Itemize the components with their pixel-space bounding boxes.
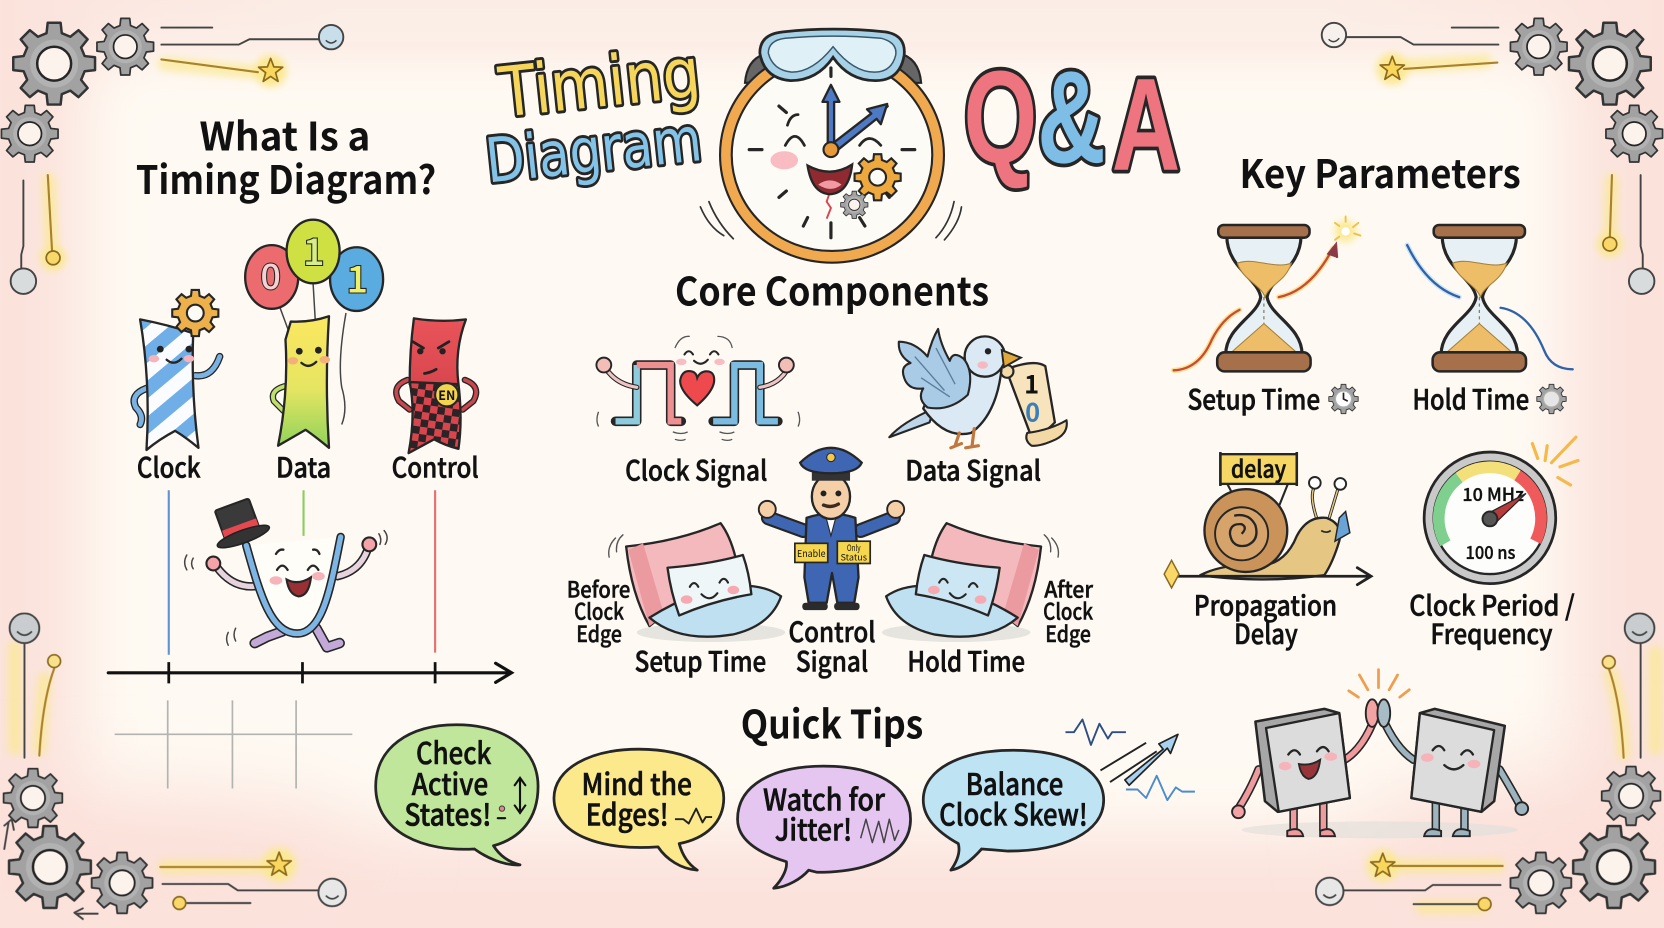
label: Control Signal: Signal [796, 640, 868, 680]
speech bubble: watch for jitter: Jitter! [775, 806, 852, 849]
character: control ribbon [396, 318, 476, 453]
gears on face [855, 154, 901, 200]
clock hands [822, 85, 839, 146]
motion lines [700, 202, 961, 240]
icon: clock signal with heart [596, 336, 800, 440]
label: Propagation Delay [1194, 583, 1337, 652]
character: data ribbon with balloons: 1 [346, 250, 369, 305]
arms and legs [1238, 716, 1521, 830]
arms [217, 548, 368, 586]
title word: Q&A: A [1112, 52, 1180, 198]
title word: Timing: Timing [495, 33, 704, 134]
heading: Timing Diagram? [136, 149, 436, 206]
speech bubble: watch for jitter: Watch for [763, 777, 886, 820]
time axis [108, 662, 512, 683]
character: officer: Enable [797, 546, 826, 560]
label: Clock Period / Frequency: Clock Period / [1409, 583, 1575, 623]
top hat [206, 495, 271, 552]
speech bubble: check active states: Active [412, 761, 488, 804]
icon: carrier pigeon with scroll [889, 329, 1067, 448]
label: Clock Signal: Clock Signal [625, 449, 767, 489]
character: officer: Only [847, 542, 861, 554]
speech bubble: balance clock skew: Clock Skew! [939, 792, 1088, 835]
icon: hold pillows [882, 523, 1058, 642]
mouth [808, 164, 852, 194]
burst [1349, 670, 1409, 697]
character: dancing clock edge with top hat [185, 495, 387, 647]
character: data ribbon with balloons: 1 [302, 222, 325, 277]
panel: core components [567, 261, 1094, 680]
goggles [760, 29, 904, 81]
chip: left [1255, 709, 1350, 812]
illustration: chips high-five [1232, 670, 1528, 838]
character: clock ribbon with gear [134, 290, 220, 450]
face [276, 550, 319, 570]
signal lines [169, 490, 435, 655]
label: Data: Data [276, 446, 331, 486]
icon: speed gauge: 100 ns [1466, 539, 1516, 565]
faint grid [115, 700, 352, 788]
panel: key parameters [1164, 143, 1578, 652]
speech bubble: check active states [376, 725, 538, 865]
icon: hold hourglass [1407, 225, 1573, 371]
panel: what is a timing diagram [108, 106, 512, 788]
speech bubble: watch for jitter [738, 766, 911, 888]
title: Timing Diagram Q&A [482, 33, 1180, 198]
label: Propagation Delay: Propagation [1194, 583, 1337, 623]
label: Control Signal: Control [788, 610, 876, 650]
corner decoration: bottom left [4, 613, 346, 919]
speech bubble: check active states: States! [404, 792, 491, 835]
speech bubble: mind the edges: Edges! [586, 792, 669, 835]
icon: snail with delay sign: delay [1231, 451, 1286, 485]
eyes and cheek [785, 115, 881, 145]
heading: What Is a [200, 106, 370, 163]
icon: small clock gear [1537, 384, 1566, 414]
label: Setup Time: Setup Time [1187, 378, 1320, 418]
corner decoration: bottom right [1316, 613, 1660, 913]
note: before clock edge: Before [567, 572, 630, 604]
label: Data Signal: Data Signal [905, 449, 1041, 489]
label: Clock: Clock [137, 446, 201, 486]
note: after clock edge: After [1044, 572, 1094, 604]
note: before clock edge: Edge [576, 617, 622, 649]
label: Propagation Delay: Delay [1234, 612, 1298, 652]
corner decoration: top left [1, 18, 343, 294]
scroll [1006, 363, 1055, 437]
label: Setup Time: Setup Time [635, 640, 766, 680]
speech bubble: balance clock skew [923, 750, 1104, 870]
label: Hold Time: Hold Time [1412, 378, 1529, 418]
heading: Key Parameters [1239, 143, 1521, 200]
crack [827, 189, 831, 219]
note: after clock edge [1043, 572, 1094, 649]
panel: quick tips [376, 694, 1195, 888]
clock ticks [749, 68, 915, 238]
speech bubble: mind the edges [554, 749, 724, 870]
note: after clock edge: Clock [1043, 595, 1093, 627]
icon: small clock gear [1329, 384, 1358, 414]
label: Control Signal [788, 610, 876, 680]
label: Clock Period / Frequency [1409, 583, 1575, 652]
label: Hold Time: Hold Time [907, 640, 1025, 680]
title word: Q&A: Q& [964, 44, 1106, 191]
legs [255, 628, 340, 647]
icon: speed gauge: 10 MHz [1462, 481, 1524, 507]
icon: setup hourglass [1174, 216, 1360, 371]
icon: clock mascot with goggles [700, 29, 961, 257]
note: before clock edge: Clock [574, 595, 624, 627]
heading: Quick Tips [741, 694, 923, 751]
character: data ribbon with balloons [245, 220, 383, 448]
character: data ribbon with balloons: 0 [260, 249, 281, 301]
chip: right [1411, 709, 1505, 812]
icon: snail with delay sign [1164, 451, 1371, 588]
label: Control: Control [392, 446, 479, 486]
body [923, 366, 1002, 434]
speech bubble: mind the edges: Mind the [582, 761, 692, 804]
icon: skew arrow and waves [1065, 719, 1195, 800]
corner decoration: top right [1322, 18, 1663, 294]
motion marks [185, 531, 387, 645]
icon: carrier pigeon with scroll: 1 [1024, 365, 1039, 402]
goggle strap [745, 53, 921, 83]
label: Clock Period / Frequency: Frequency [1431, 612, 1553, 652]
clock face [726, 53, 938, 257]
heading [136, 106, 436, 206]
speech bubble: check active states: Check [416, 730, 491, 773]
note: after clock edge: Edge [1045, 617, 1091, 649]
icon: carrier pigeon with scroll: 0 [1025, 392, 1040, 429]
character: officer: Status [840, 551, 867, 563]
body [246, 537, 341, 634]
title word: Diagram: Diagram [482, 103, 705, 197]
wing [899, 329, 970, 408]
icon: setup pillows [609, 523, 785, 642]
note: before clock edge [567, 572, 630, 649]
speech bubble: balance clock skew: Balance [966, 761, 1063, 804]
character: officer [759, 448, 904, 610]
icon: speed gauge [1424, 437, 1578, 584]
character: control ribbon: EN [438, 385, 455, 404]
heading: Core Components [675, 261, 989, 318]
